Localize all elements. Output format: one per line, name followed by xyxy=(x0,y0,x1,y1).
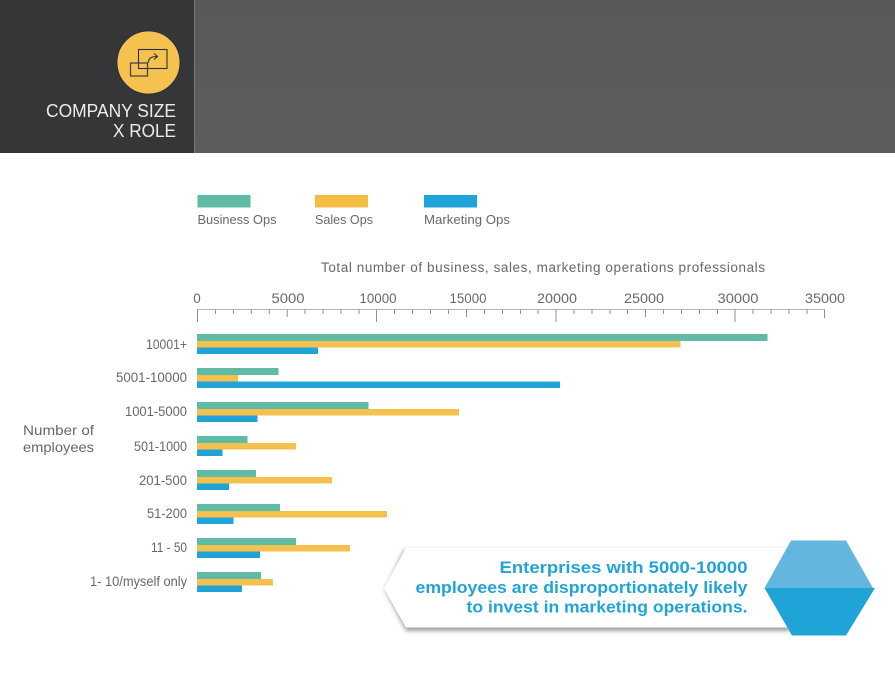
bars: 201-500 xyxy=(197,470,332,490)
axis labels: 30000 xyxy=(718,291,758,306)
callout text: Enterprises with 5000-10000 xyxy=(500,558,748,577)
row labels: 1- 10/myself only xyxy=(90,574,187,589)
bar chart xyxy=(197,334,768,592)
y-axis title: employees xyxy=(23,439,94,455)
header band xyxy=(0,0,895,153)
y-axis title xyxy=(23,422,94,455)
row labels: 51-200 xyxy=(147,506,187,521)
axis labels: 15000 xyxy=(450,291,486,306)
row labels: 5001-10000 xyxy=(116,370,187,385)
axis labels: 20000 xyxy=(537,291,577,306)
axis ruler xyxy=(197,310,825,322)
callout text: to invest in marketing operations. xyxy=(466,598,748,616)
title: X ROLE xyxy=(113,121,176,141)
title xyxy=(46,101,176,141)
bars: 5001-10000 xyxy=(197,368,560,388)
callout text xyxy=(416,558,748,616)
axis title: Total number of business, sales, marketing operations professionals xyxy=(321,260,765,275)
row labels: 1001-5000 xyxy=(125,404,187,419)
row labels: 501-1000 xyxy=(134,439,187,454)
hexagon xyxy=(764,540,875,636)
bars: 10001+ xyxy=(197,334,768,354)
legend xyxy=(198,195,510,227)
row labels: 201-500 xyxy=(139,473,187,488)
legend: Marketing Ops xyxy=(424,212,510,227)
axis labels xyxy=(193,291,845,306)
callout text: employees are disproportionately likely xyxy=(416,578,748,597)
row labels: 10001+ xyxy=(146,337,187,352)
legend: Business Ops xyxy=(198,212,277,227)
bars: 1-10/myself only xyxy=(197,572,273,592)
axis labels: 35000 xyxy=(805,291,845,306)
legend: Sales Ops xyxy=(315,212,373,227)
callout xyxy=(384,548,800,631)
y-axis title: Number of xyxy=(23,422,94,438)
title: COMPANY SIZE xyxy=(46,101,176,121)
axis labels: 25000 xyxy=(624,291,664,306)
row labels xyxy=(90,337,187,589)
axis labels: 10000 xyxy=(360,291,396,306)
row labels: 11 - 50 xyxy=(151,540,187,555)
bars: 11 - 50 xyxy=(197,538,350,558)
axis labels: 5000 xyxy=(272,291,304,306)
icon: overlapping rectangles with arrow xyxy=(117,31,180,94)
bars: 51-200 xyxy=(197,504,387,524)
axis labels: 0 xyxy=(193,291,201,306)
bars: 501-1000 xyxy=(197,436,296,456)
bars: 1001-5000 xyxy=(197,402,459,422)
